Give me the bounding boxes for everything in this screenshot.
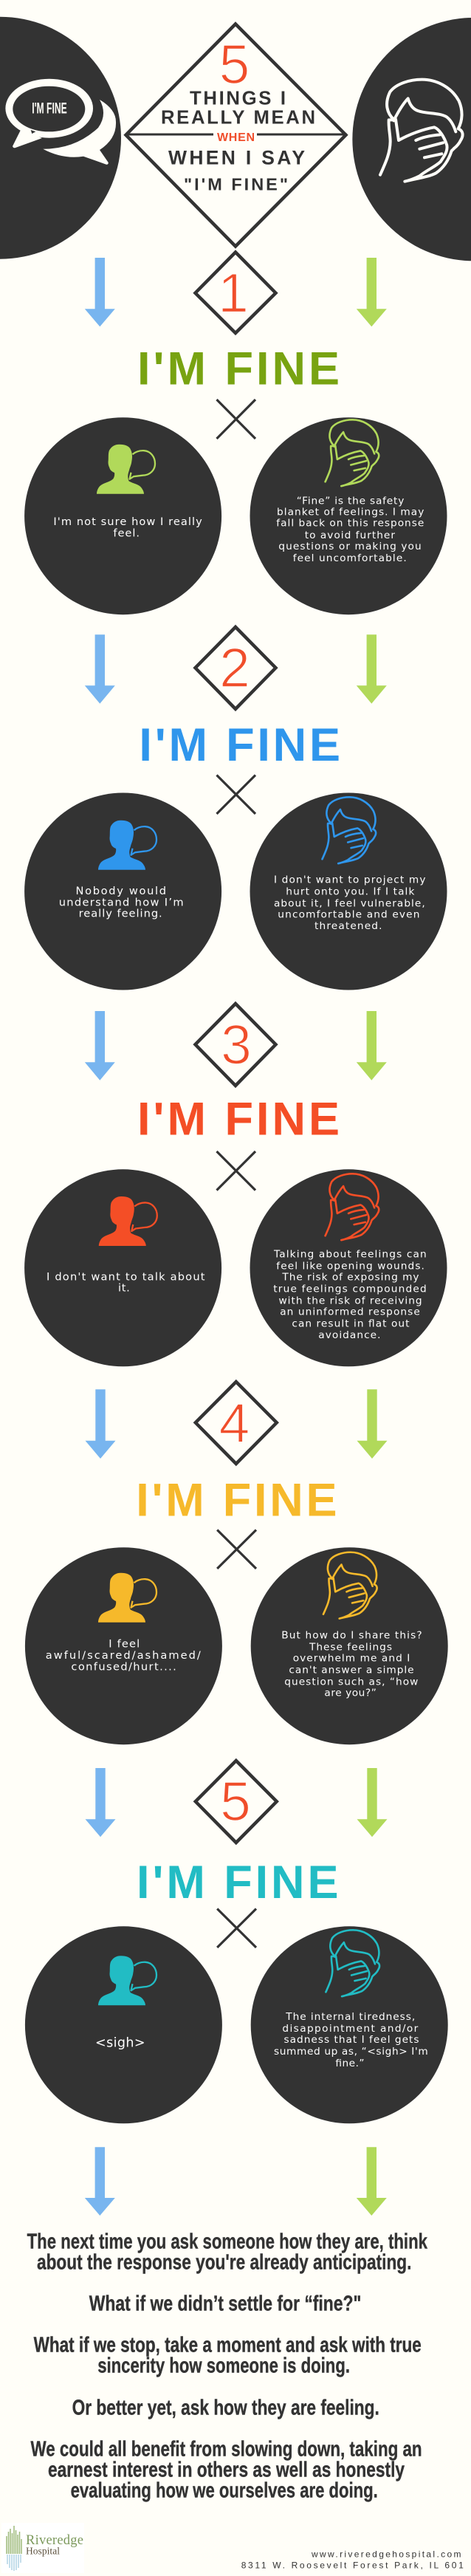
title diamond: THINGS I xyxy=(190,89,286,109)
number diamond 4 xyxy=(196,1382,277,1464)
arrow: blue xyxy=(85,634,115,704)
right circle: an uninformed response xyxy=(280,1306,420,1318)
left circle xyxy=(24,1169,221,1366)
left circle: confused/hurt.... xyxy=(71,1661,176,1674)
arrow: green xyxy=(357,1768,387,1837)
right circle: hurt onto you. If I talk xyxy=(286,886,414,897)
cross xyxy=(217,775,255,814)
right circle: overwhelm me and I xyxy=(293,1652,410,1664)
closing text: sincerity how someone is doing. xyxy=(97,2354,350,2377)
section 1 xyxy=(24,253,447,614)
heading: I'M FINE xyxy=(137,1857,338,1908)
section 5 xyxy=(25,1761,448,2123)
right circle: “Fine” is the safety xyxy=(297,495,404,507)
heading: I'M FINE xyxy=(137,1094,340,1145)
logo: Riveredge Hospital: Riveredge xyxy=(26,2533,83,2548)
icon: speech bubbles: I'M FINE xyxy=(32,99,67,117)
right circle: avoidance. xyxy=(318,1329,381,1341)
number diamond 2 xyxy=(195,627,276,709)
right circle: uncomfortable and even xyxy=(278,908,419,920)
header left circle with speech bubbles xyxy=(0,17,121,259)
arrow: blue xyxy=(85,1011,115,1080)
cross xyxy=(217,1530,256,1569)
right circle: questions or making you xyxy=(278,541,422,552)
right circle: disappointment and/or xyxy=(282,2023,419,2035)
title diamond: WHEN I SAY xyxy=(168,147,305,169)
title diamond: REALLY MEAN xyxy=(161,108,315,129)
arrow: blue xyxy=(85,258,115,326)
right circle: to avoid further xyxy=(305,530,395,541)
arrow: green xyxy=(357,1011,387,1080)
right circle: I don't want to project my xyxy=(274,874,425,886)
number diamond 5: 5 xyxy=(220,1770,251,1832)
left circle: Nobody would xyxy=(75,885,166,897)
right circle: The risk of exposing my xyxy=(281,1271,419,1283)
closing text xyxy=(27,2230,427,2502)
right circle: about it, I feel vulnerable, xyxy=(274,897,425,909)
number diamond 2: 2 xyxy=(219,637,250,699)
title diamond xyxy=(126,24,347,247)
right circle: But how do I share this? xyxy=(281,1629,422,1641)
right circle: with the risk of receiving xyxy=(279,1295,422,1306)
title diamond: 5 xyxy=(219,33,250,95)
arrow: green xyxy=(357,634,387,704)
right circle: Talking about feelings can xyxy=(273,1248,427,1260)
arrow: blue xyxy=(86,1768,115,1837)
header right circle with face icon xyxy=(352,18,471,261)
right circle: These feelings xyxy=(309,1641,392,1653)
left circle xyxy=(24,417,221,614)
right circle xyxy=(251,1547,448,1744)
left circle: I feel xyxy=(109,1638,140,1651)
right circle: sadness that I feel gets xyxy=(283,2034,419,2046)
heading: I'M FINE xyxy=(137,343,340,395)
left circle xyxy=(24,793,221,990)
title diamond: "I'M FINE" xyxy=(184,175,288,194)
arrow: final blue xyxy=(85,2147,115,2216)
left circle: feel. xyxy=(113,527,140,540)
cross xyxy=(217,1908,256,1948)
left circle: I'm not sure how I really xyxy=(53,515,202,528)
number diamond 1 xyxy=(195,253,276,333)
left circle xyxy=(25,1547,222,1744)
number diamond 1: 1 xyxy=(218,262,249,324)
number diamond 5 xyxy=(196,1761,277,1843)
right circle xyxy=(251,1926,448,2123)
logo: Riveredge Hospital xyxy=(1,2523,84,2573)
left circle: understand how I’m xyxy=(59,897,184,909)
icon: speech bubbles xyxy=(5,79,116,165)
right circle: fine.” xyxy=(335,2058,365,2069)
left circle: I don't want to talk about xyxy=(47,1270,205,1283)
closing text: evaluating how we ourselves are doing. xyxy=(71,2479,378,2502)
right circle: can't answer a simple xyxy=(289,1664,414,1676)
cross xyxy=(217,400,255,439)
heading: I'M FINE xyxy=(136,1474,337,1526)
right circle xyxy=(250,793,447,990)
number diamond 3 xyxy=(195,1004,276,1086)
footer contact: www.riveredgehospital.com xyxy=(311,2549,461,2559)
left circle: <sigh> xyxy=(95,2035,145,2050)
right circle: are you?” xyxy=(324,1687,377,1699)
right circle xyxy=(250,417,447,614)
heading: I'M FINE xyxy=(139,719,340,771)
arrow: final green xyxy=(357,2147,387,2216)
section 2 xyxy=(24,627,447,990)
right circle: feel like opening wounds. xyxy=(276,1260,424,1272)
cross xyxy=(217,1151,255,1191)
footer contact: 8311 W. Roosevelt Forest Park, IL 601 xyxy=(241,2560,464,2571)
right circle: blanket of feelings. I may xyxy=(277,506,424,518)
right circle: feel uncomfortable. xyxy=(293,552,407,564)
arrow: green xyxy=(357,258,387,326)
left circle: it. xyxy=(118,1281,130,1294)
title diamond: WHEN xyxy=(217,131,255,144)
right circle xyxy=(250,1169,447,1366)
number diamond 4: 4 xyxy=(219,1391,250,1453)
left circle: really feeling. xyxy=(79,908,162,920)
right circle: threatened. xyxy=(314,920,382,932)
closing text: What if we didn’t settle for “fine?" xyxy=(89,2292,361,2316)
section 4 xyxy=(25,1382,448,1744)
closing text: Or better yet, ask how they are feeling. xyxy=(72,2396,379,2419)
right circle: summed up as, “<sigh> I'm xyxy=(274,2046,428,2058)
arrow: blue xyxy=(86,1389,115,1459)
left circle xyxy=(25,1926,222,2123)
right circle: question such as, “how xyxy=(284,1676,418,1688)
arrow: green xyxy=(357,1389,387,1459)
section 3 xyxy=(24,1004,447,1366)
right circle: The internal tiredness, xyxy=(285,2011,415,2023)
right circle: fall back on this response xyxy=(276,518,424,530)
logo: Riveredge Hospital: Hospital xyxy=(26,2545,60,2556)
right circle: can result in flat out xyxy=(292,1318,410,1329)
left circle: awful/scared/ashamed/ xyxy=(46,1649,201,1662)
number diamond 3: 3 xyxy=(221,1013,252,1075)
right circle: true feelings compounded xyxy=(273,1283,427,1295)
footer contact xyxy=(241,2549,464,2571)
